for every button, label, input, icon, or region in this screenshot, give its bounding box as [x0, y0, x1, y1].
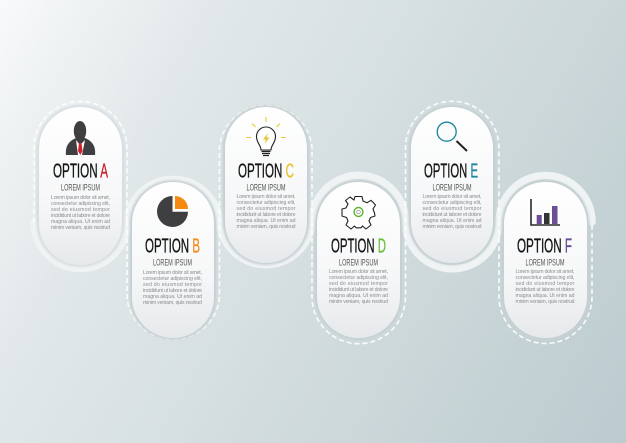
body text: minim veniam, quis nostrud — [422, 224, 482, 230]
body text: Lorem ipsum dolor sit amet, — [422, 194, 482, 200]
panel: option F — [502, 180, 590, 340]
subheading: LOREM IPSUM — [339, 258, 378, 268]
dashed outlines — [34, 101, 592, 344]
body text: consectetur adipiscing elit, — [236, 200, 296, 206]
body text: Lorem ipsum dolor sit amet, — [51, 195, 110, 201]
body text: magna aliqua. Ut enim ad — [143, 294, 202, 300]
icon: light bulb — [246, 117, 286, 156]
heading: OPTION B — [145, 236, 200, 258]
body text: sed do eiusmod tempor — [236, 206, 296, 212]
body text: Lorem ipsum dolor sit amet, — [516, 269, 574, 275]
body text: Lorem ipsum dolor sit amet, — [236, 194, 296, 200]
serpentine connecting band — [34, 175, 592, 269]
panel: option A — [36, 105, 124, 267]
body text: magna aliqua. Ut enim ad — [422, 218, 482, 224]
body text: sed do eiusmod tempor — [422, 206, 482, 212]
body text: minim veniam, quis nostrud — [329, 299, 388, 305]
icon: magnifier — [437, 122, 467, 151]
panel: option B — [130, 180, 216, 340]
body text: incididunt ut labore et dolore — [143, 288, 202, 294]
icon: gear — [342, 196, 376, 229]
panel: option E — [408, 105, 496, 265]
heading: OPTION E — [424, 160, 478, 182]
body text: magna aliqua. Ut enim ad — [51, 219, 110, 225]
panel: option D — [314, 180, 402, 340]
body text: minim veniam, quis nostrud — [51, 225, 110, 231]
body text: incididunt ut labore et dolore — [51, 213, 110, 219]
icon: pie chart — [157, 196, 188, 227]
body text: consectetur adipiscing elit, — [51, 201, 110, 207]
body text: incididunt ut labore et dolore — [236, 212, 296, 218]
body text: magna aliqua. Ut enim ad — [329, 293, 388, 299]
heading: OPTION C — [238, 160, 294, 182]
body text: sed do eiusmod tempor — [516, 281, 575, 287]
icon: businessman — [66, 121, 95, 155]
body text: consectetur adipiscing elit, — [422, 200, 482, 206]
body text: minim veniam, quis nostrud — [516, 299, 575, 305]
body text: Lorem ipsum dolor sit amet, — [329, 269, 388, 275]
body text: magna aliqua. Ut enim ad — [236, 218, 296, 224]
body text: sed do eiusmod tempor — [51, 207, 110, 213]
body text: incididunt ut labore et dolore — [422, 212, 482, 218]
body text: minim veniam, quis nostrud — [236, 224, 296, 230]
body text: magna aliqua. Ut enim ad — [516, 293, 575, 299]
heading: OPTION F — [517, 236, 572, 258]
subheading: LOREM IPSUM — [153, 258, 192, 268]
icon: bar chart — [531, 199, 560, 225]
body text: Lorem ipsum dolor sit amet, — [143, 270, 202, 276]
body text: incididunt ut labore et dolore — [516, 287, 575, 293]
body text: sed do eiusmod tempor — [329, 281, 388, 287]
heading: OPTION D — [331, 236, 386, 258]
heading: OPTION A — [53, 160, 108, 182]
subheading: LOREM IPSUM — [526, 258, 565, 268]
body text: consectetur adipiscing elit, — [143, 276, 202, 282]
panel: option C — [222, 105, 310, 265]
body text: consectetur adipiscing elit, — [516, 275, 574, 281]
subheading: LOREM IPSUM — [432, 182, 472, 194]
body text: consectetur adipiscing elit, — [329, 275, 388, 281]
subheading: LOREM IPSUM — [61, 182, 100, 194]
body text: minim veniam, quis nostrud — [143, 300, 202, 306]
body text: sed do eiusmod tempor — [143, 282, 202, 288]
body text: incididunt ut labore et dolore — [329, 287, 388, 293]
subheading: LOREM IPSUM — [246, 182, 286, 194]
